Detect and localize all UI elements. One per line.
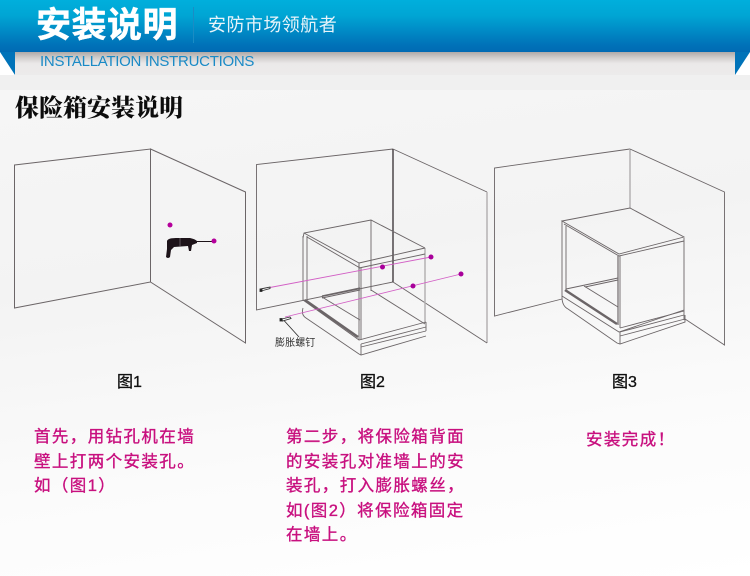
safe outline — [302, 220, 426, 355]
main title: 安装说明 — [36, 6, 178, 45]
expansion screws — [260, 287, 299, 337]
step 2 text: 装孔，打入膨胀螺丝， — [286, 477, 465, 495]
step 2 text: 的安装孔对准墙上的安 — [286, 452, 465, 470]
step 1 text — [34, 428, 195, 495]
step 3 text: 安装完成！ — [586, 431, 676, 449]
wall outline — [494, 149, 724, 345]
band below ribbon — [0, 75, 750, 90]
icon: electric drill — [166, 238, 212, 258]
caption: figure 3: 图3 — [612, 374, 637, 391]
alignment lines and holes — [262, 254, 464, 317]
ribbon fold left — [0, 52, 15, 75]
step 2 text: 如(图2）将保险箱固定 — [286, 502, 465, 520]
label: expansion screw: 膨胀螺钉 — [275, 338, 315, 349]
step 1 text: 如（图1） — [34, 477, 116, 495]
ribbon fold right — [735, 52, 750, 75]
header banner — [0, 0, 750, 90]
step 1 text: 首先，用钻孔机在墙 — [34, 428, 195, 446]
diagram: figure 1 drilling — [14, 148, 246, 344]
step 2 text: 第二步，将保险箱背面 — [286, 428, 465, 446]
step 2 text: 在墙上。 — [286, 526, 358, 544]
english subtitle: INSTALLATION INSTRUCTIONS — [40, 53, 254, 70]
slogan: 安防市场领航者 — [208, 15, 337, 35]
section heading: 保险箱安装说明 — [15, 96, 183, 122]
caption: figure 1: 图1 — [117, 374, 142, 391]
divider — [193, 7, 194, 43]
diagram: figure 3 installed — [494, 148, 725, 346]
diagram: figure 2 mounting — [256, 148, 488, 356]
right wall — [150, 149, 246, 343]
blue band — [0, 0, 750, 52]
wall outline — [256, 149, 487, 343]
drill hole marks — [168, 222, 216, 244]
step 2 text — [286, 428, 465, 544]
step 1 text: 壁上打两个安装孔。 — [34, 452, 195, 470]
installed safe — [562, 208, 685, 344]
ribbon shadow band — [15, 52, 735, 75]
caption: figure 2: 图2 — [360, 374, 385, 391]
left wall — [14, 149, 150, 308]
